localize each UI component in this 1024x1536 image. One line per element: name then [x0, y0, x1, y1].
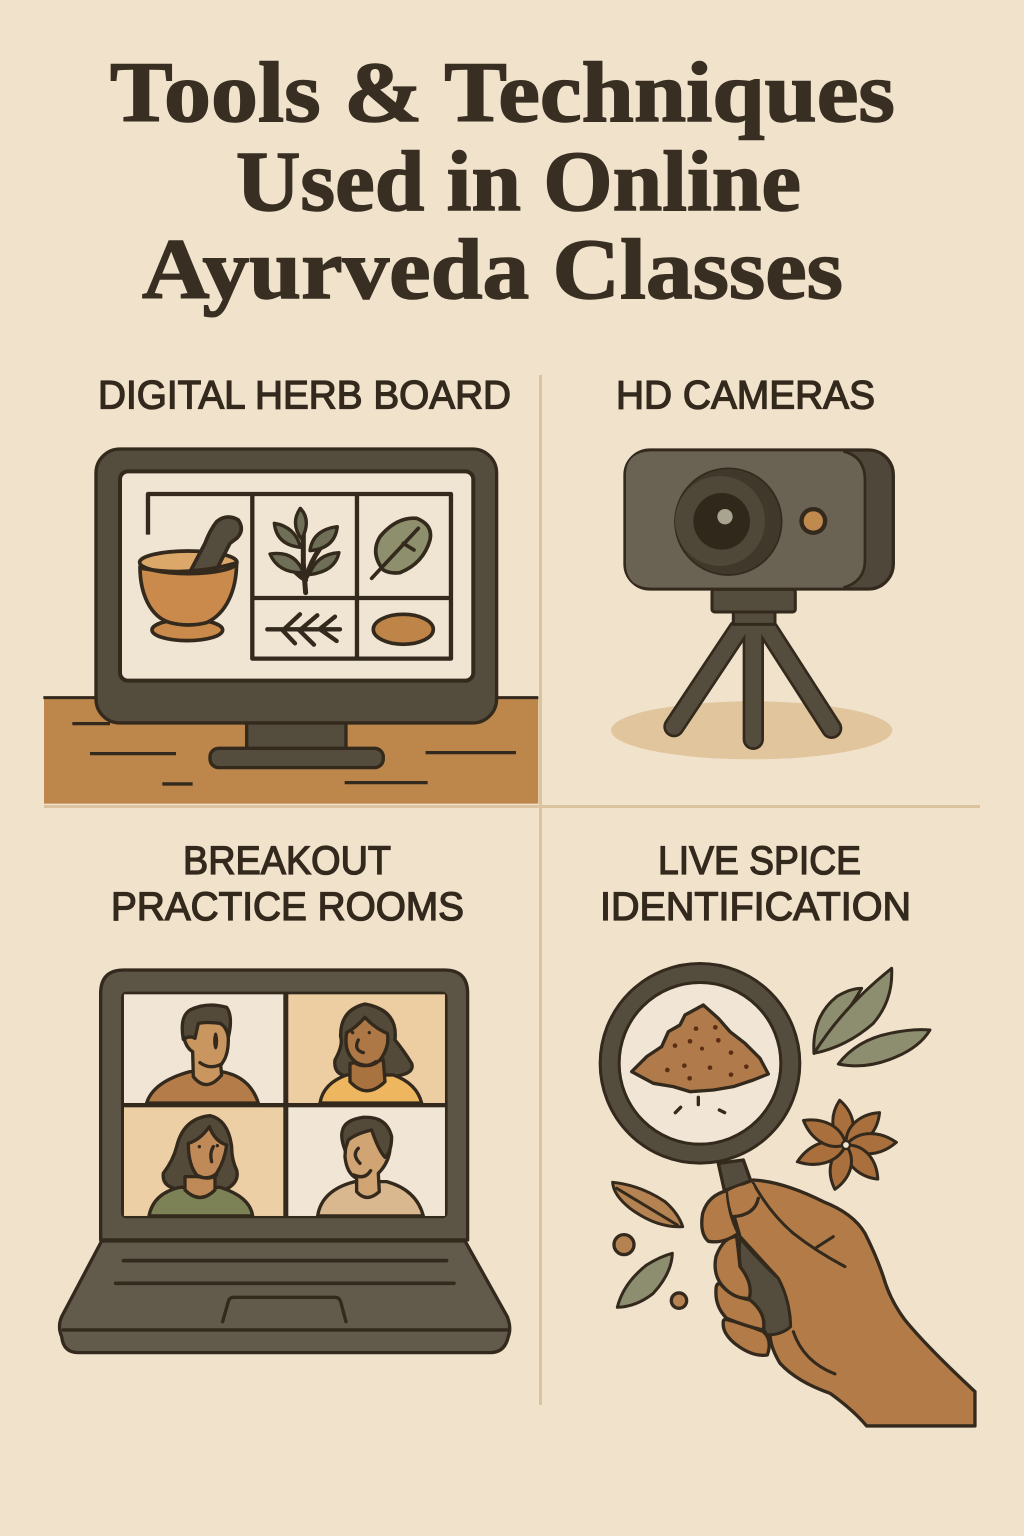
heading: live spice identification: LIVE SPICE — [658, 839, 861, 883]
video cell 4 — [288, 1107, 445, 1216]
seeds — [614, 1235, 687, 1308]
heading: breakout practice rooms: BREAKOUT — [183, 839, 391, 883]
camera body — [625, 450, 893, 589]
heading: live spice identification — [600, 839, 911, 929]
panel: live spice identification — [600, 839, 975, 1426]
screen — [120, 471, 473, 681]
icon: herb sprig — [270, 508, 339, 593]
laptop lid — [101, 970, 468, 1240]
hand lines — [753, 1183, 845, 1374]
shadow — [611, 701, 892, 759]
illustration: laptop video call — [59, 970, 510, 1353]
heading: breakout practice rooms: PRACTICE ROOMS — [111, 885, 464, 929]
magnifier handle top — [718, 1160, 752, 1193]
title: Ayurveda Classes — [142, 221, 843, 317]
indicator light — [799, 507, 827, 535]
panel: digital herb board — [43, 374, 538, 804]
video screen — [121, 992, 448, 1218]
monitor frame — [96, 449, 497, 723]
panel: breakout practice rooms — [59, 839, 510, 1353]
star anise — [794, 1099, 897, 1192]
laptop base — [59, 1241, 510, 1353]
monitor stand — [210, 722, 383, 768]
heading: digital herb board: DIGITAL HERB BOARD — [98, 374, 511, 418]
panel: hd cameras — [611, 374, 893, 759]
icon: seed — [373, 614, 433, 644]
camera mount — [712, 589, 795, 624]
green pod — [617, 1253, 672, 1307]
illustration: monitor on desk — [43, 449, 538, 804]
desk — [43, 698, 538, 804]
tripod legs — [674, 627, 832, 739]
title: Tools & Techniques — [110, 44, 895, 140]
icon: leaf — [372, 518, 431, 578]
magnifier grip — [739, 1238, 791, 1335]
icon: rosemary — [267, 614, 340, 645]
heading: breakout practice rooms — [111, 839, 464, 929]
video cell 3 — [124, 1107, 283, 1216]
illustration: webcam on tripod — [611, 450, 893, 759]
spice powder pile — [632, 1005, 768, 1113]
video cell 1 — [124, 994, 283, 1103]
lens — [675, 468, 782, 575]
icon: mortar and pestle — [140, 517, 241, 641]
herb grid — [148, 494, 451, 659]
illustration: hand with magnifier and spices — [610, 968, 975, 1426]
title — [110, 44, 895, 317]
video cell 2 — [288, 994, 445, 1103]
bay leaves — [814, 968, 930, 1066]
title: Used in Online — [236, 133, 801, 229]
magnifier ring — [610, 973, 790, 1154]
heading: live spice identification: IDENTIFICATION — [600, 885, 911, 929]
cardamom pod — [613, 1182, 683, 1227]
fingers — [702, 1184, 769, 1355]
hand — [727, 1180, 975, 1426]
heading: hd cameras: HD CAMERAS — [616, 374, 875, 418]
